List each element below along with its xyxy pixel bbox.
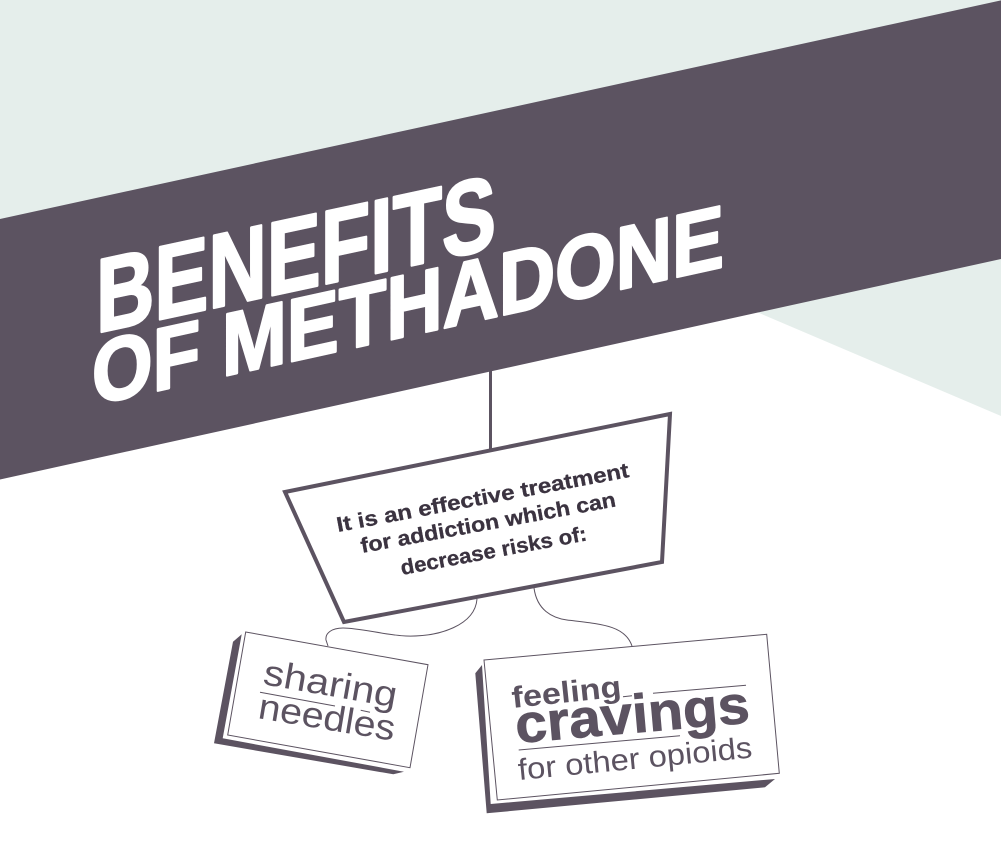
statement box [285,414,670,622]
banner [0,0,1001,480]
card text: sharing [261,652,401,715]
connector: banner to text box [489,371,492,452]
panel: feeling cravings card [475,634,779,813]
panel: treatment statement [285,414,670,622]
statement text [335,459,631,580]
card text: feeling [510,671,623,715]
card shadow [214,634,404,774]
connector: statement to feeling cravings [534,588,632,646]
title line: OF METHADONE: OF METHADONE [92,187,724,425]
card shadow [475,665,775,813]
card text: cravings [513,675,752,755]
statement text: decrease risks of: [399,523,589,580]
card text [256,652,401,749]
card text: needles [256,685,399,749]
statement text: It is an effective treatment [335,459,631,537]
card rules [519,685,746,750]
connector: statement to sharing needles [326,599,477,646]
panel: sharing needles card [214,632,428,774]
card text: for other opioids [517,732,754,787]
background: pale top panel [0,0,1001,230]
card face [484,634,779,800]
statement text: for addiction which can [359,489,618,558]
card text [510,671,754,787]
card rules [260,692,370,712]
title line: BENEFITS: BENEFITS [96,152,496,356]
card face [228,632,428,768]
title [92,152,724,425]
background: pale right triangle [745,250,1001,416]
